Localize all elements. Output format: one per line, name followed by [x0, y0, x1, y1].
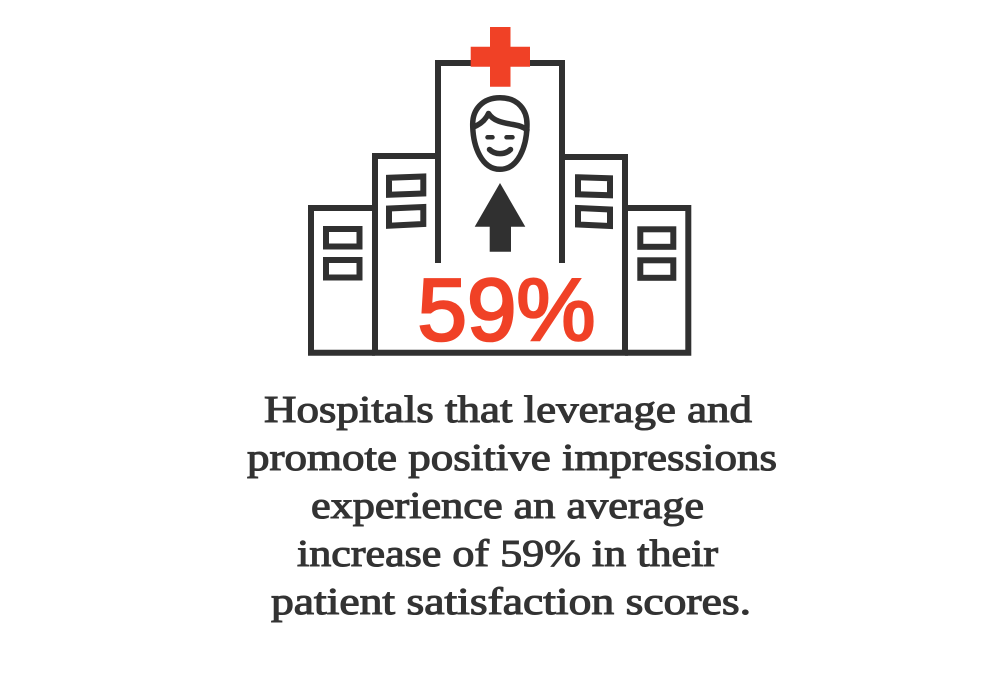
- text block: description: patient satisfaction scores.: [271, 581, 751, 623]
- center tower: [438, 63, 562, 263]
- windows: left outer wing: [326, 229, 360, 278]
- right outer wing: [625, 208, 688, 353]
- text block: description: Hospitals that leverage and: [264, 389, 752, 431]
- text block: description: promote positive impressions: [247, 437, 777, 479]
- icon: hospital building: [311, 63, 688, 353]
- text block: description: experience an average: [311, 485, 704, 527]
- windows: right outer wing: [640, 229, 673, 278]
- icon: red medical cross: [471, 27, 530, 87]
- text block: description: [247, 389, 777, 623]
- statistic: 59%: 59%: [418, 260, 596, 359]
- left outer wing: [311, 208, 375, 353]
- text block: description: increase of 59% in their: [297, 533, 718, 575]
- right middle wing: [622, 157, 628, 353]
- left middle wing: [375, 156, 625, 353]
- windows: right middle wing: [578, 177, 610, 226]
- windows: left middle wing: [389, 176, 423, 226]
- icon: smiling face: [473, 98, 527, 169]
- icon: upward arrow: [475, 183, 525, 252]
